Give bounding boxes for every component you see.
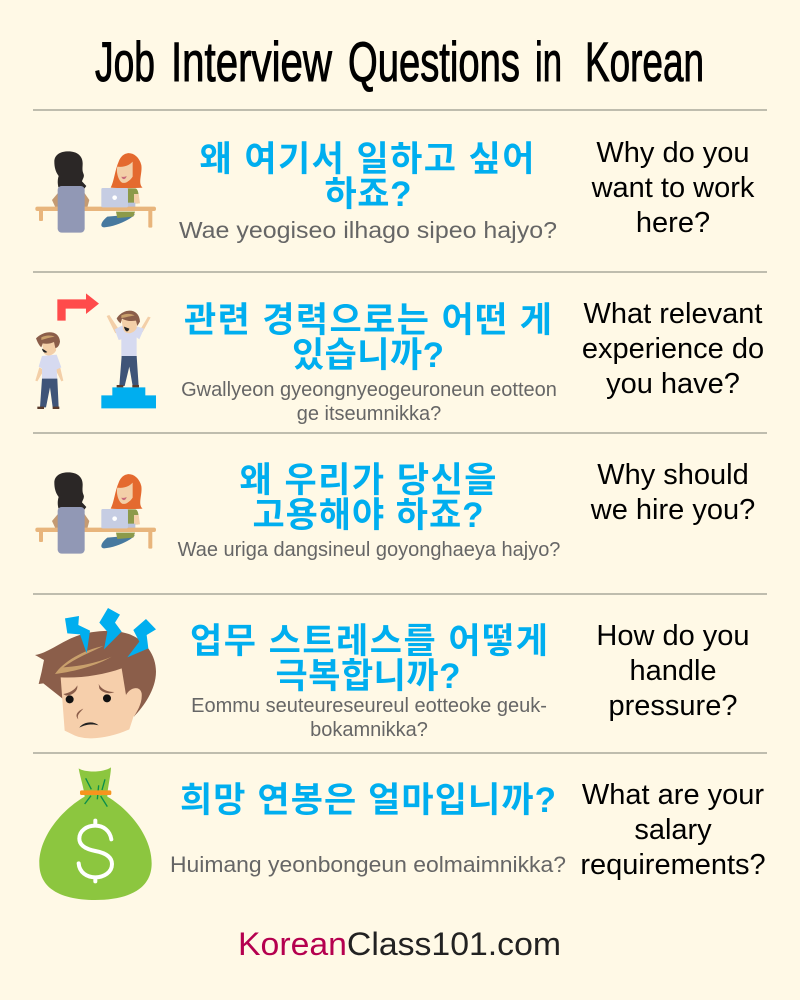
korean question 4: 극복합니까?: [276, 657, 460, 696]
title: Interview: [171, 30, 332, 93]
english question 1: Why do you: [596, 137, 750, 169]
korean question 2: 있습니까?: [292, 336, 444, 375]
english question 1: want to work: [591, 172, 755, 204]
panel: question 4: [35, 608, 750, 741]
romanization 4: bokamnikka?: [310, 719, 428, 741]
title: Questions: [348, 30, 520, 93]
english question 5: requirements?: [580, 849, 766, 881]
hair: [35, 631, 156, 717]
romanization 5: Huimang yeonbongeun eolmaimnikka?: [170, 852, 566, 877]
panel: question 5: [39, 767, 766, 900]
korean question 5: 희망 연봉은 얼마입니까?: [180, 781, 556, 820]
english question 2: you have?: [606, 368, 740, 400]
footer brand: KoreanClass101.com: [238, 926, 561, 962]
podium: [101, 387, 156, 408]
face: [61, 668, 134, 738]
korean question 1: 하죠?: [324, 175, 412, 214]
title: Korean: [585, 30, 704, 93]
english question 2: experience do: [582, 333, 764, 365]
title: [95, 30, 704, 93]
english question 4: handle: [629, 655, 717, 687]
icon: money bag: [39, 767, 152, 900]
english question 3: Why should: [597, 459, 749, 491]
icon: stressed head: [35, 608, 156, 738]
romanization 2: Gwallyeon gyeongnyeogeuroneun eotteon: [181, 379, 557, 401]
korean question 1: 왜 여기서 일하고 싶어: [200, 140, 534, 179]
korean question 4: 업무 스트레스를 어떻게: [190, 622, 548, 661]
romanization 4: Eommu seuteureseureul eotteoke geuk-: [191, 695, 547, 717]
english question 5: salary: [634, 814, 712, 846]
title: Job: [95, 30, 155, 93]
english question 1: here?: [636, 207, 710, 239]
english question 2: What relevant: [584, 298, 762, 330]
korean question 3: 고용해야 하죠?: [252, 496, 484, 535]
romanization 1: Wae yeogiseo ilhago sipeo hajyo?: [179, 217, 557, 243]
english question 4: pressure?: [609, 690, 737, 722]
romanization 3: Wae uriga dangsineul goyonghaeya hajyo?: [178, 539, 560, 561]
ear: [126, 688, 142, 717]
korean question 2: 관련 경력으로는 어떤 게: [184, 301, 552, 340]
icon: man stepping up to podium: [35, 293, 156, 409]
panel: question 3: [35, 459, 755, 561]
english question 4: How do you: [596, 620, 750, 652]
icon: interview at a desk: [35, 151, 156, 233]
english question 5: What are your: [582, 779, 764, 811]
romanization 2: ge itseumnikka?: [297, 403, 441, 425]
icon: interview at a desk: [35, 472, 156, 554]
panel: question 2: [35, 293, 764, 425]
english question 3: we hire you?: [590, 494, 755, 526]
panel: question 1: [35, 137, 755, 243]
title: in: [535, 30, 562, 93]
korean question 3: 왜 우리가 당신을: [240, 461, 496, 500]
arrow: [57, 293, 99, 321]
